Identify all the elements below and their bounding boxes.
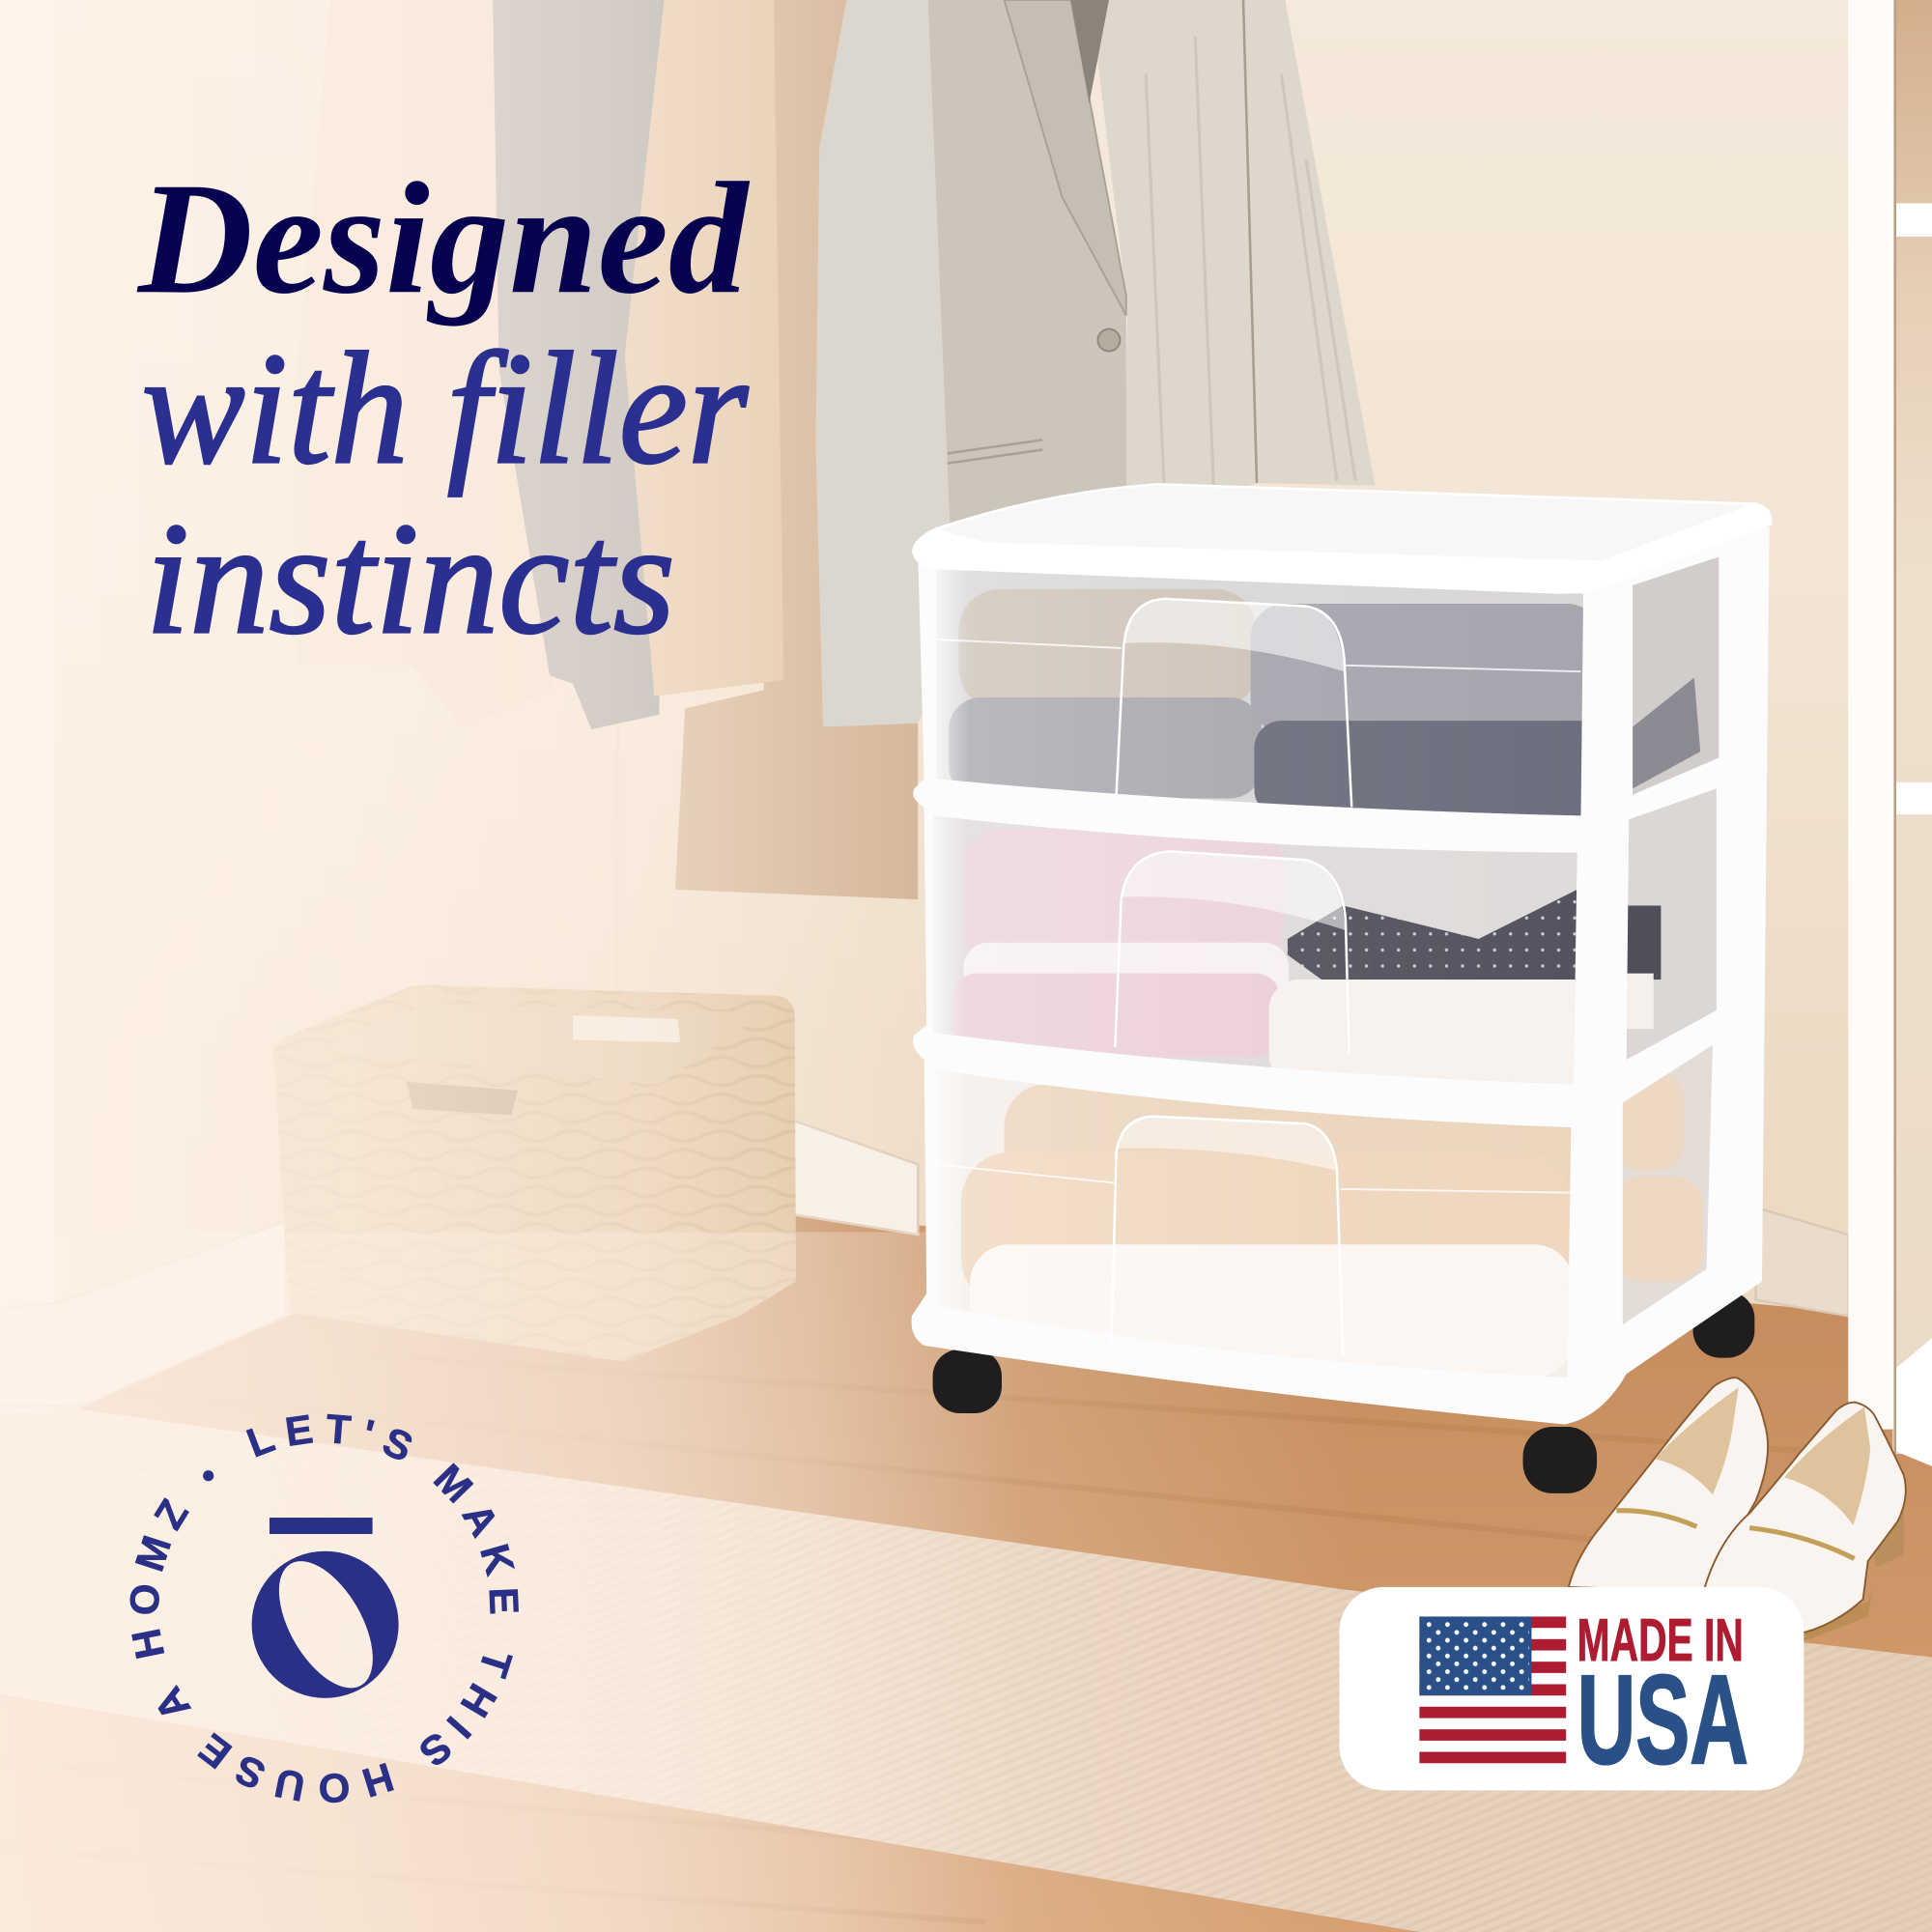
top drawer	[936, 569, 1605, 817]
loafers	[1569, 1378, 1906, 1641]
drawer cabinet	[912, 483, 1772, 1493]
title line: with filler: with filler	[142, 319, 749, 497]
floor: wood boards	[0, 1213, 1932, 1932]
seal logo mark	[252, 1518, 399, 1698]
wheels	[933, 1292, 1754, 1493]
right shoe	[1873, 1506, 1904, 1567]
title line: Designed: Designed	[136, 149, 750, 327]
coat: tan body	[675, 0, 918, 899]
coat: dark grey	[487, 0, 665, 729]
title line: instincts: instincts	[146, 489, 675, 667]
brand seal	[129, 1414, 519, 1803]
side windows	[1614, 557, 1719, 1324]
bottom drawer	[952, 1072, 1571, 1378]
blazer sleeve	[815, 0, 950, 727]
coat: tan sleeve	[625, 0, 783, 696]
blazer button	[1097, 329, 1120, 352]
wicker basket	[273, 985, 796, 1361]
coat: striped light jacket	[1091, 0, 1375, 524]
badge: made in USA	[1339, 1587, 1804, 1790]
coat: cream cardigan	[294, 0, 552, 727]
wash overlay fading the left side	[0, 0, 1355, 1932]
blazer lapel	[1005, 0, 1126, 316]
blazer neck gap	[1070, 0, 1109, 103]
middle drawer	[933, 815, 1577, 1084]
blazer pocket	[948, 440, 1042, 464]
US flag icon	[1419, 1616, 1566, 1763]
skirting boards	[0, 1119, 1848, 1406]
left shoe	[1569, 1378, 1768, 1592]
shelving unit	[1848, 0, 1932, 1466]
hanging coats	[294, 0, 918, 899]
title	[136, 149, 750, 667]
cabinet body	[912, 527, 1770, 1424]
seal dot	[203, 1470, 213, 1481]
lid	[912, 483, 1772, 594]
badge text: MADE IN: MADE IN	[1577, 1606, 1744, 1674]
rug	[0, 1408, 1932, 1932]
blazer: greige	[815, 0, 1126, 727]
badge text: USA: USA	[1577, 1648, 1748, 1790]
seal circular slogan: LET'S MAKE THIS HOUSE A HOMZ	[129, 1414, 519, 1803]
